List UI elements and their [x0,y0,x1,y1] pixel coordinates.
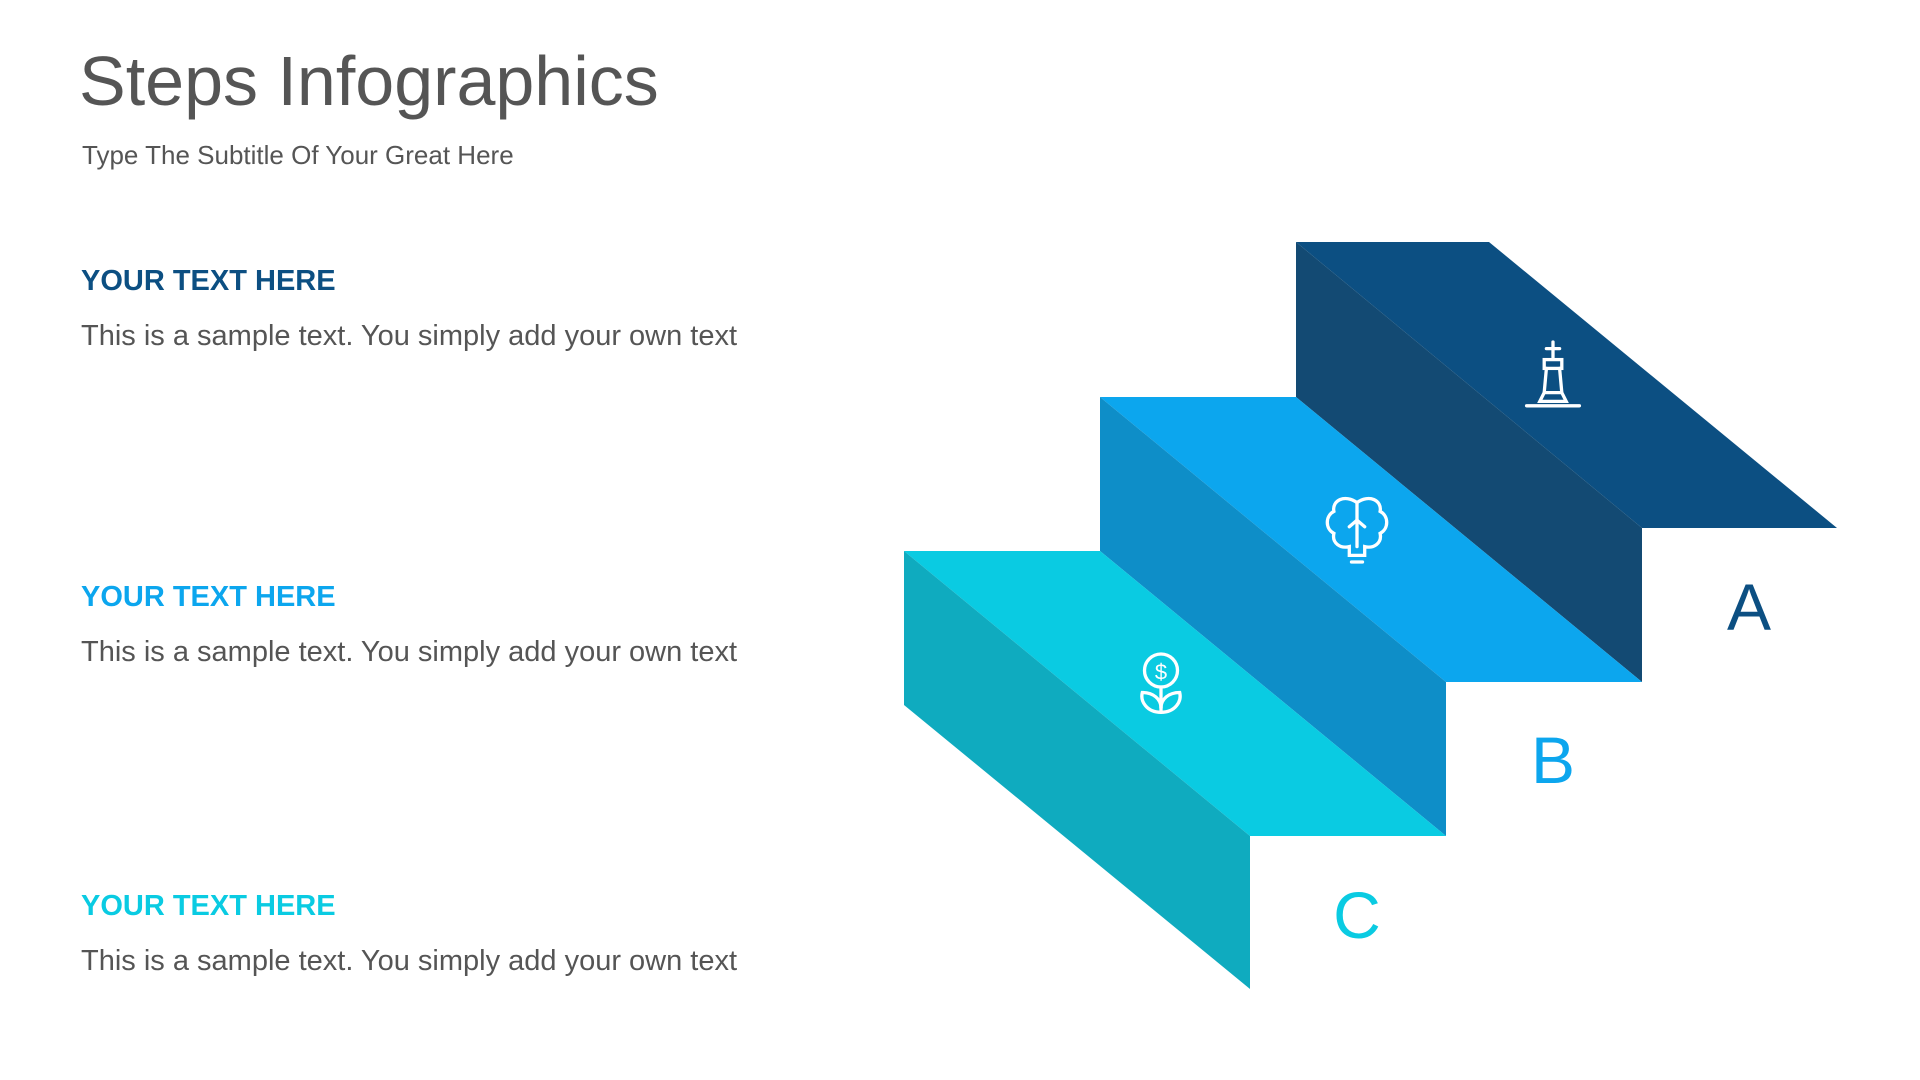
heading B: YOUR TEXT HERE [81,581,336,613]
heading C: YOUR TEXT HERE [81,890,336,922]
label B: B [1531,723,1575,797]
text block A [81,265,737,352]
heading A: YOUR TEXT HERE [81,265,336,297]
step B [1100,397,1642,836]
icon: money flower [1142,654,1180,712]
text block C [81,890,737,977]
label C: C [1333,878,1381,952]
step A [1296,242,1837,682]
text block B [81,581,737,668]
icon: chess king [1527,342,1579,406]
label A: A [1727,570,1771,644]
icon: money flower: $ [1155,659,1167,684]
body B: This is a sample text. You simply add your own text [81,636,737,668]
title: Steps Infographics [79,42,659,120]
icon: brain [1327,499,1387,562]
body A: This is a sample text. You simply add your own text [81,320,737,352]
body C: This is a sample text. You simply add your own text [81,945,737,977]
subtitle: Type The Subtitle Of Your Great Here [82,140,514,170]
step C [904,551,1446,989]
